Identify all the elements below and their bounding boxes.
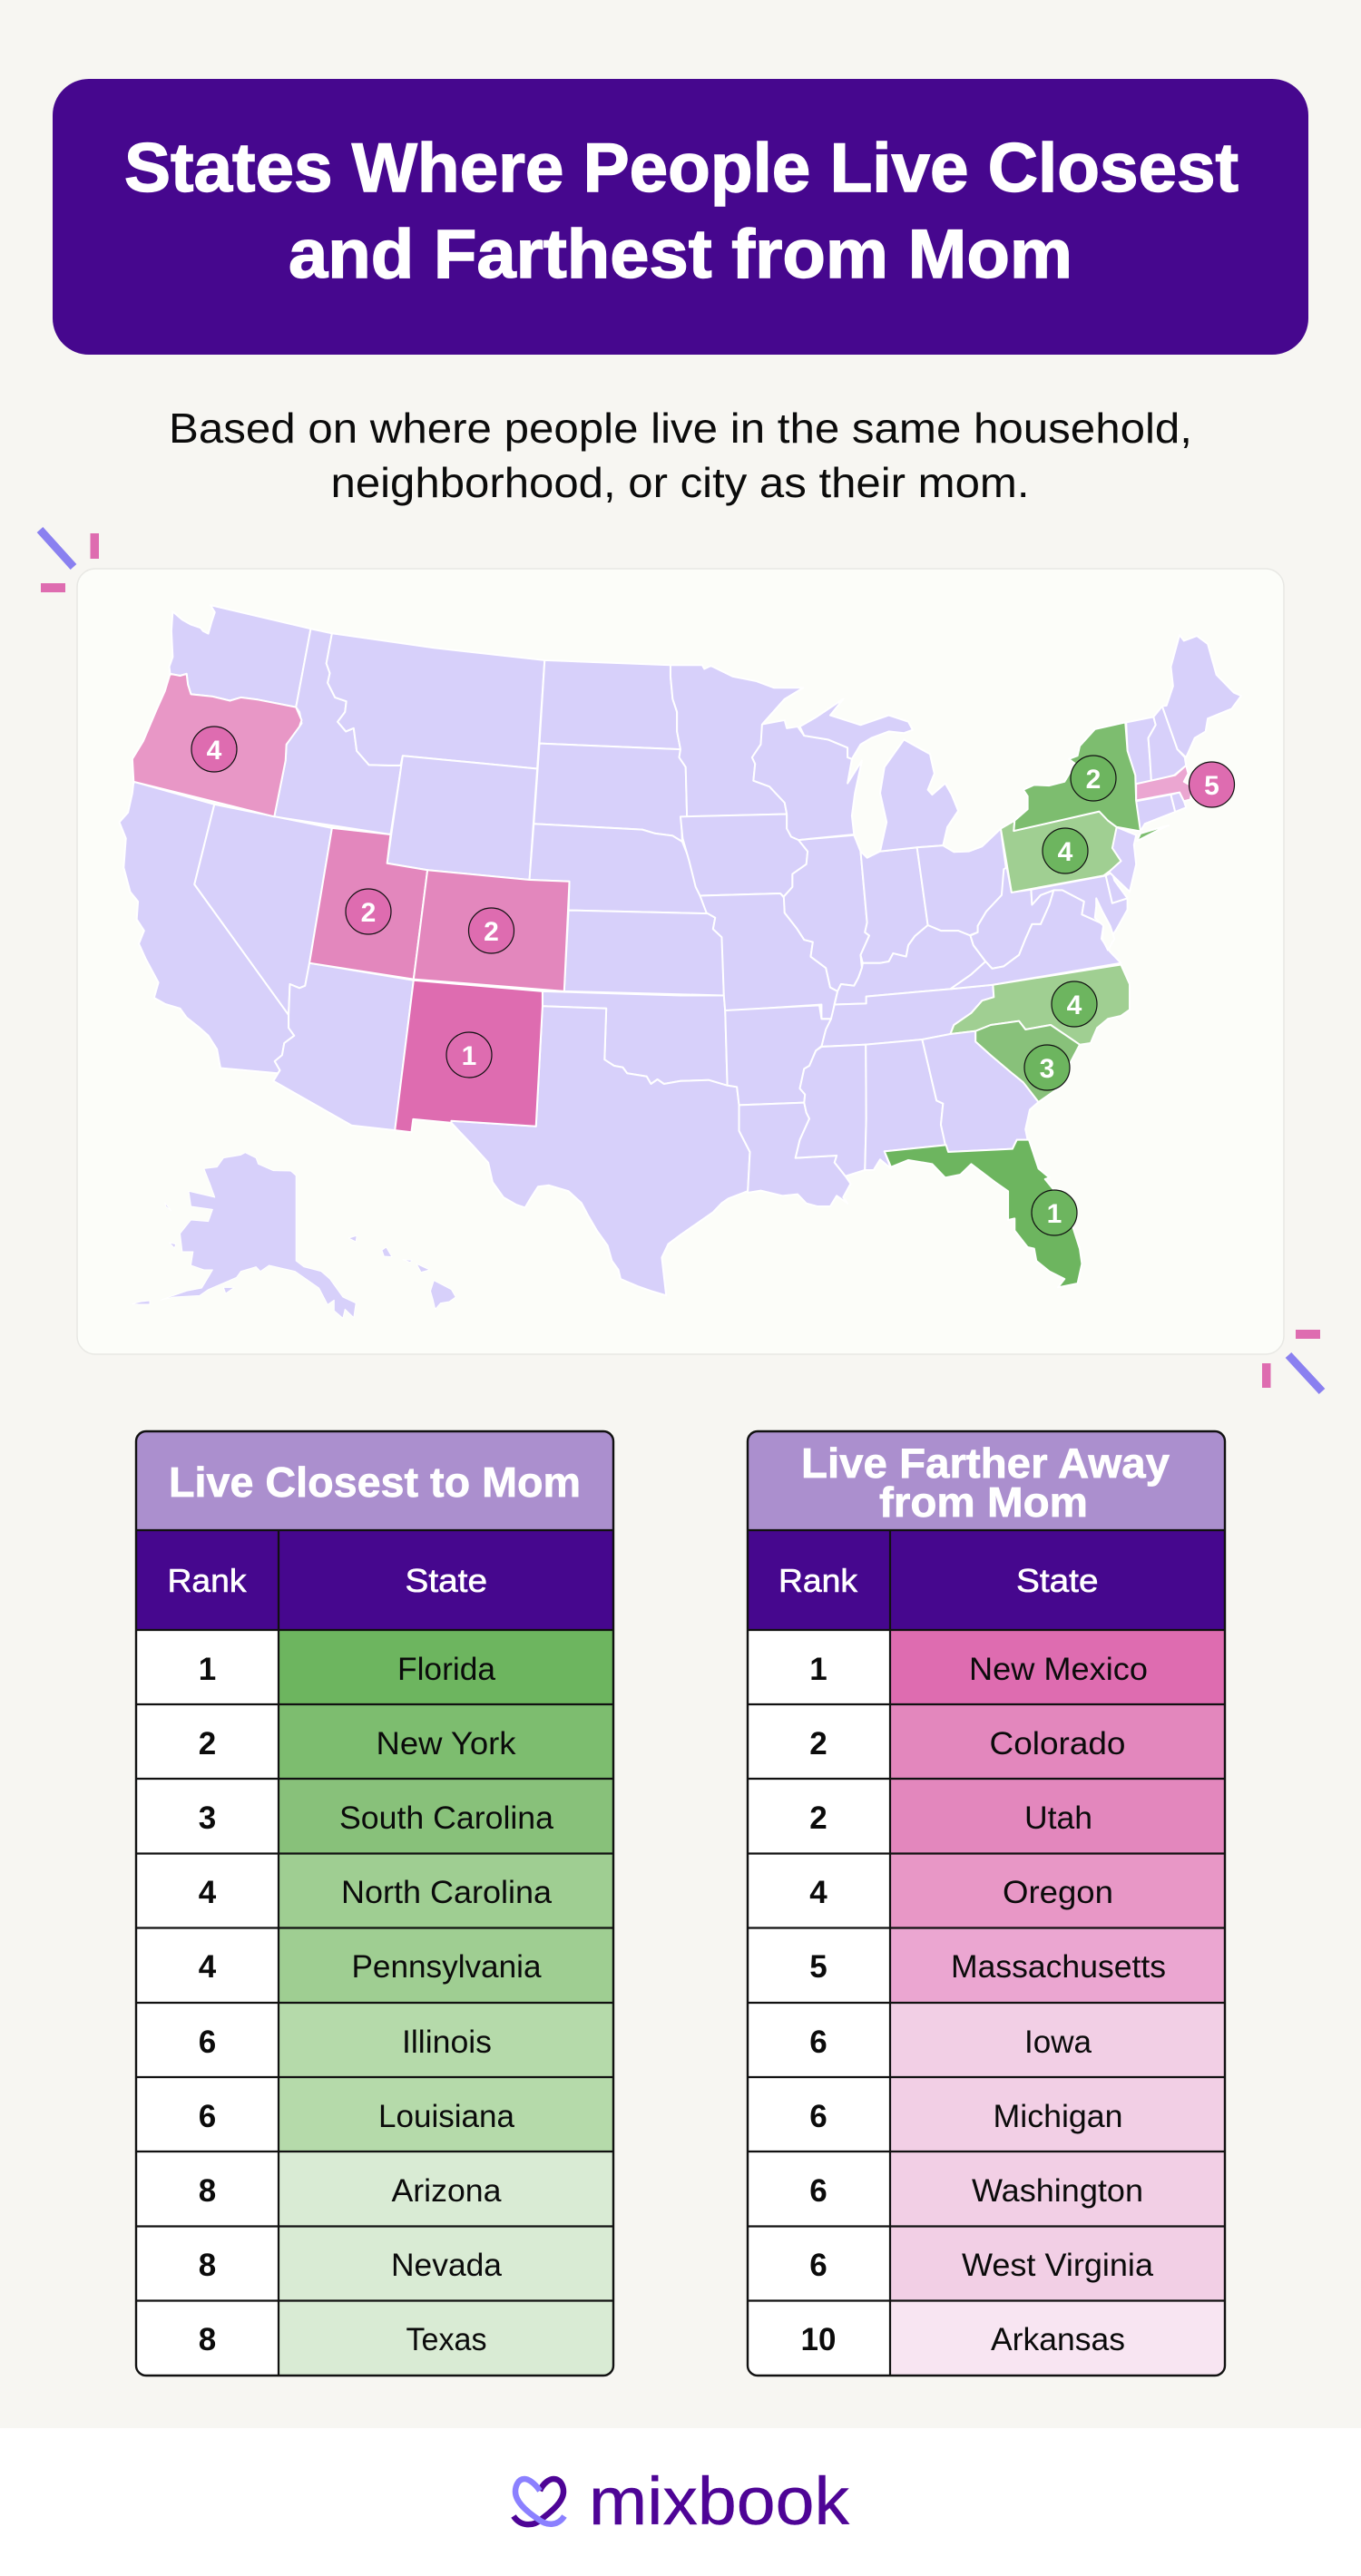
state: Mississippi <box>796 1045 867 1176</box>
row 6 <box>199 2025 492 2060</box>
state: Kentucky <box>835 925 985 1004</box>
table title: Live Closest to Mom <box>169 1459 581 1506</box>
state: Oregon <box>132 674 301 816</box>
state: Alabama <box>865 1039 946 1170</box>
row 9: Nevada <box>391 2248 503 2283</box>
state: Massachusetts <box>1136 766 1192 801</box>
state: Connecticut <box>1136 795 1175 831</box>
row 2 <box>809 1726 1125 1761</box>
Nunivak Island <box>170 1243 176 1248</box>
Alaska and Hawaii <box>132 1153 455 1318</box>
row 2: 2 <box>809 1726 827 1761</box>
row 2: New York <box>376 1726 516 1761</box>
row 6: Illinois <box>402 2025 492 2060</box>
row 9 <box>809 2248 1154 2283</box>
column header: Rank: Rank <box>778 1562 858 1599</box>
row 8 <box>809 2173 1143 2209</box>
table title: Live Farther Away <box>801 1439 1170 1487</box>
row 10: Texas <box>406 2322 486 2357</box>
state: South Dakota <box>534 744 687 842</box>
title banner: and Farthest from Mom <box>289 216 1072 293</box>
table title: from Mom <box>879 1478 1088 1526</box>
wordmark: mixbook <box>589 2464 850 2539</box>
St Lawrence Island <box>165 1203 171 1211</box>
Hawaii: Maui <box>416 1264 430 1273</box>
row 1: Florida <box>397 1652 496 1687</box>
state: Montana <box>327 633 544 768</box>
state: Tennessee <box>821 985 994 1047</box>
state: Indiana <box>860 847 928 963</box>
row 8: Washington <box>972 2173 1143 2209</box>
rank badge: North Carolina 4 <box>1052 981 1097 1027</box>
row 5: 4 <box>199 1949 217 1985</box>
rank badge: North Carolina 4: 4 <box>1067 990 1082 1020</box>
row 8: 8 <box>199 2173 216 2209</box>
row 7: Louisiana <box>378 2099 515 2134</box>
logo: mixbook <box>514 2464 850 2539</box>
row 1 <box>809 1652 1148 1687</box>
row 3: Utah <box>1024 1800 1092 1836</box>
row 8: Arizona <box>392 2173 502 2209</box>
state: Rhode Island <box>1170 793 1186 812</box>
row 4 <box>809 1875 1113 1910</box>
Hawaii: Big Island <box>430 1281 455 1309</box>
rank badge: Florida 1: 1 <box>1047 1199 1062 1229</box>
rank badge: Massachusetts 5: 5 <box>1204 771 1219 801</box>
row 7: Michigan <box>993 2099 1123 2134</box>
Hawaii: Oahu <box>382 1247 392 1257</box>
rank badge: Pennsylvania 4 <box>1043 828 1088 873</box>
state: Arizona <box>273 963 414 1130</box>
state: Vermont <box>1126 717 1156 784</box>
row 3 <box>199 1800 554 1836</box>
state: South Carolina <box>975 1021 1080 1102</box>
row 9 <box>199 2248 503 2283</box>
row 10: 8 <box>199 2322 216 2357</box>
state: Florida <box>885 1140 1082 1287</box>
rank badge: New Mexico 1: 1 <box>462 1041 476 1071</box>
rank badge: Colorado 2 <box>468 908 514 953</box>
state: Pennsylvania <box>1001 812 1121 893</box>
row 5 <box>809 1949 1166 1985</box>
row 3: 3 <box>199 1800 216 1836</box>
row 7 <box>199 2099 515 2134</box>
row 10: Arkansas <box>991 2322 1125 2357</box>
rank badge: Pennsylvania 4: 4 <box>1058 837 1073 867</box>
row 6: 6 <box>199 2025 216 2060</box>
Aleutian islands <box>132 1301 150 1304</box>
column header: Rank: Rank <box>167 1562 248 1599</box>
subtitle: neighborhood, or city as their mom. <box>330 459 1029 506</box>
row 2: 2 <box>199 1726 216 1761</box>
row 4: 4 <box>809 1875 827 1910</box>
row 2: Colorado <box>989 1726 1125 1761</box>
state: Delaware <box>1106 873 1128 903</box>
column header: State: State <box>1016 1562 1098 1599</box>
rank badge: Oregon 4 <box>191 727 237 772</box>
column header: State: State <box>405 1562 487 1599</box>
row 9: West Virginia <box>962 2248 1154 2283</box>
state: Kansas <box>564 911 724 995</box>
state: Michigan lower peninsula <box>880 739 958 852</box>
state: New York, Long Island <box>1137 825 1169 841</box>
row 6: Iowa <box>1024 2025 1092 2060</box>
row 3: South Carolina <box>339 1800 554 1836</box>
state: California <box>120 782 294 1073</box>
Hawaii: Kauai <box>348 1235 357 1242</box>
row 3 <box>809 1800 1092 1836</box>
US map <box>120 605 1241 1318</box>
row 1: 1 <box>199 1652 216 1687</box>
state: Michigan upper peninsula <box>800 699 913 759</box>
table: Live Closest to Mom <box>136 1431 613 2376</box>
icon: heart <box>514 2479 564 2524</box>
table title <box>801 1439 1170 1526</box>
row 7: 6 <box>199 2099 216 2134</box>
row 4 <box>199 1875 553 1910</box>
row 1 <box>199 1652 496 1687</box>
decorative sparkle: top left <box>40 530 99 592</box>
title banner: States Where People Live Closest <box>124 130 1239 207</box>
state: Arkansas <box>725 1005 831 1105</box>
rank badge: Massachusetts 5 <box>1189 762 1234 807</box>
row 10: 10 <box>801 2322 836 2357</box>
row 5: 5 <box>809 1949 827 1985</box>
Chesapeake Bay <box>1095 898 1114 950</box>
state: Nevada <box>194 805 332 1015</box>
Alaska islands <box>223 1287 234 1293</box>
rank badge: Colorado 2: 2 <box>484 917 499 947</box>
state: Virginia <box>950 890 1121 989</box>
state: North Carolina <box>950 965 1130 1045</box>
state: Washington <box>170 605 310 707</box>
row 5 <box>199 1949 542 1985</box>
row 7 <box>809 2099 1123 2134</box>
state: North Dakota <box>540 660 680 749</box>
state: Maine <box>1162 635 1241 757</box>
state: Iowa <box>680 814 808 897</box>
state: Minnesota <box>671 665 803 816</box>
state: New Mexico <box>395 981 543 1132</box>
state: New Hampshire <box>1149 707 1186 782</box>
row 5: Pennsylvania <box>352 1949 542 1985</box>
row 6: 6 <box>809 2025 827 2060</box>
row 4: 4 <box>199 1875 217 1910</box>
row 4: North Carolina <box>341 1875 553 1910</box>
row 3: 2 <box>809 1800 827 1836</box>
rank badge: Oregon 4: 4 <box>207 736 222 766</box>
south states <box>725 1005 1082 1287</box>
decorative sparkle: bottom right <box>1262 1330 1322 1391</box>
state: Illinois <box>784 835 869 991</box>
rank badge: New York 2 <box>1071 756 1116 801</box>
rank badge: South Carolina 3: 3 <box>1040 1054 1054 1084</box>
rank badge: Utah 2: 2 <box>361 898 376 928</box>
row 1: 1 <box>809 1652 827 1687</box>
row 7: 6 <box>809 2099 827 2134</box>
rank badge: New York 2: 2 <box>1086 765 1101 795</box>
subtitle: Based on where people live in the same household, <box>169 405 1192 452</box>
state: Georgia <box>922 1031 1039 1152</box>
title banner <box>53 79 1308 355</box>
row 5: Massachusetts <box>951 1949 1166 1985</box>
state: Louisiana <box>739 1103 850 1206</box>
rank badge: New Mexico 1 <box>446 1032 492 1078</box>
table: Live Farther Away from Mom <box>748 1431 1225 2376</box>
row 10 <box>199 2322 486 2357</box>
row 10 <box>801 2322 1125 2357</box>
state: New Jersey <box>1108 827 1136 892</box>
row 6 <box>809 2025 1092 2060</box>
row 9: 8 <box>199 2248 216 2283</box>
state: Wisconsin <box>752 720 862 840</box>
midwest and east states <box>671 635 1241 1047</box>
Hawaii: Molokai <box>403 1260 412 1263</box>
state: West Virginia <box>970 867 1053 969</box>
rank badge: South Carolina 3 <box>1024 1045 1070 1090</box>
row 8 <box>199 2173 502 2209</box>
rank badge: Utah 2 <box>346 889 391 934</box>
row 9: 6 <box>809 2248 827 2283</box>
state: Wyoming <box>387 756 537 880</box>
state: Colorado <box>414 870 570 991</box>
subtitle <box>169 405 1192 506</box>
state: Maryland <box>1031 875 1128 942</box>
map card <box>77 569 1284 1354</box>
row 8: 6 <box>809 2173 827 2209</box>
state: Ohio <box>917 829 1006 935</box>
state: Idaho <box>274 629 401 834</box>
state: Oklahoma <box>543 991 728 1086</box>
state: Missouri <box>700 893 837 1019</box>
row 1: New Mexico <box>969 1652 1148 1687</box>
footer band <box>0 2428 1361 2576</box>
row 4: Oregon <box>1003 1875 1113 1910</box>
state: Utah <box>309 828 427 980</box>
row 2 <box>199 1726 516 1761</box>
state: Nebraska <box>530 824 709 913</box>
state: Texas <box>451 1006 750 1295</box>
state: Alaska <box>161 1153 356 1318</box>
state: New York <box>1013 722 1141 831</box>
rank badge: Florida 1 <box>1032 1190 1077 1235</box>
